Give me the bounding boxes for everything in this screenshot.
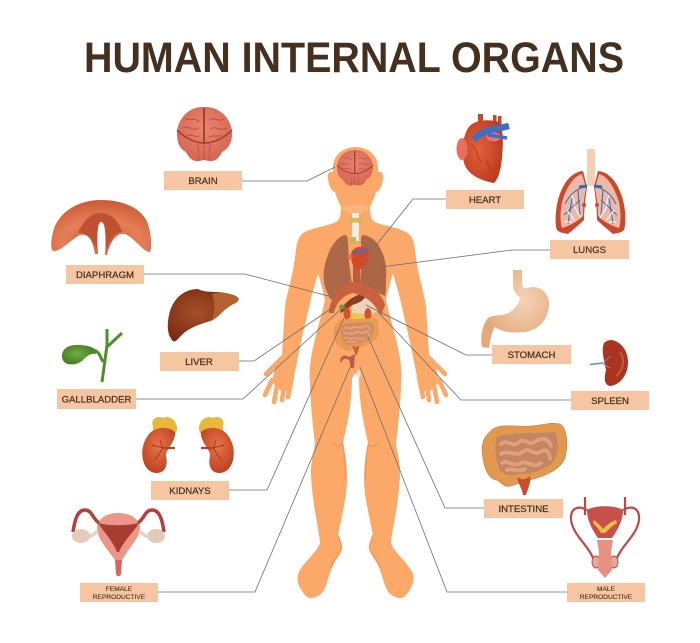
body organ: liver xyxy=(340,292,366,313)
body organ: bronchi xyxy=(350,237,356,244)
icon: intestine xyxy=(482,423,567,495)
body organ: uterus xyxy=(340,354,360,377)
body organ: heart xyxy=(347,247,369,290)
icon: kidneys xyxy=(142,417,234,473)
label: stomach xyxy=(492,345,571,364)
human body figure xyxy=(265,147,446,598)
label: brain: BRAIN xyxy=(188,176,218,187)
label: diaphragm xyxy=(66,265,144,284)
body organ: pancreas xyxy=(351,313,366,320)
body organ: trachea xyxy=(352,213,359,241)
icon: female reproductive xyxy=(72,510,165,576)
body organ: intestines xyxy=(334,318,378,355)
organs inside the body xyxy=(324,213,386,377)
label: kidneys xyxy=(151,481,229,500)
label: liver: LIVER xyxy=(185,357,213,368)
label: female reproductive: FEMALE xyxy=(106,586,133,593)
leader lines xyxy=(136,167,571,592)
label: brain xyxy=(164,171,242,190)
label: lungs: LUNGS xyxy=(573,245,606,256)
label: stomach: STOMACH xyxy=(508,350,555,361)
body organ: kidneys xyxy=(344,308,372,320)
label: lungs xyxy=(550,240,629,259)
body organ: gallbladder xyxy=(339,304,345,310)
label: liver xyxy=(160,352,239,371)
icon: brain xyxy=(177,107,232,161)
label: intestine xyxy=(484,499,563,518)
label: male reproductive xyxy=(567,583,645,602)
body organ: diaphragm xyxy=(329,282,385,315)
label: intestine: INTESTINE xyxy=(498,504,549,515)
label: gallbladder xyxy=(57,389,136,409)
label: diaphragm: DIAPHRAGM xyxy=(76,270,134,281)
label: female reproductive xyxy=(80,583,158,602)
body organ: right lung xyxy=(360,235,386,296)
label: spleen xyxy=(571,391,649,410)
label: female reproductive: REPRODUCTIVE xyxy=(93,594,146,601)
icon: liver xyxy=(168,289,239,341)
label: spleen: SPLEEN xyxy=(591,396,629,407)
label: male reproductive: MALE xyxy=(597,586,616,593)
title: HUMAN INTERNAL ORGANS xyxy=(84,34,624,82)
icon: spleen xyxy=(590,340,628,386)
label: heart: HEART xyxy=(469,195,501,206)
icon: lungs xyxy=(556,149,625,234)
icon: heart xyxy=(456,114,509,183)
icon: brain in head xyxy=(337,150,373,185)
label: gallbladder: GALLBLADDER xyxy=(62,394,131,406)
body organ: stomach xyxy=(352,297,377,314)
label: male reproductive: REPRODUCTIVE xyxy=(580,594,633,601)
label: kidneys: KIDNAYS xyxy=(169,486,211,497)
body organ: thyroid xyxy=(349,215,362,224)
icon: stomach xyxy=(481,270,549,348)
icon: gallbladder xyxy=(62,329,122,382)
label: heart xyxy=(446,190,524,209)
icon: male reproductive xyxy=(571,497,639,578)
body organ: left lung xyxy=(324,235,352,300)
icon: diaphragm xyxy=(51,200,151,255)
